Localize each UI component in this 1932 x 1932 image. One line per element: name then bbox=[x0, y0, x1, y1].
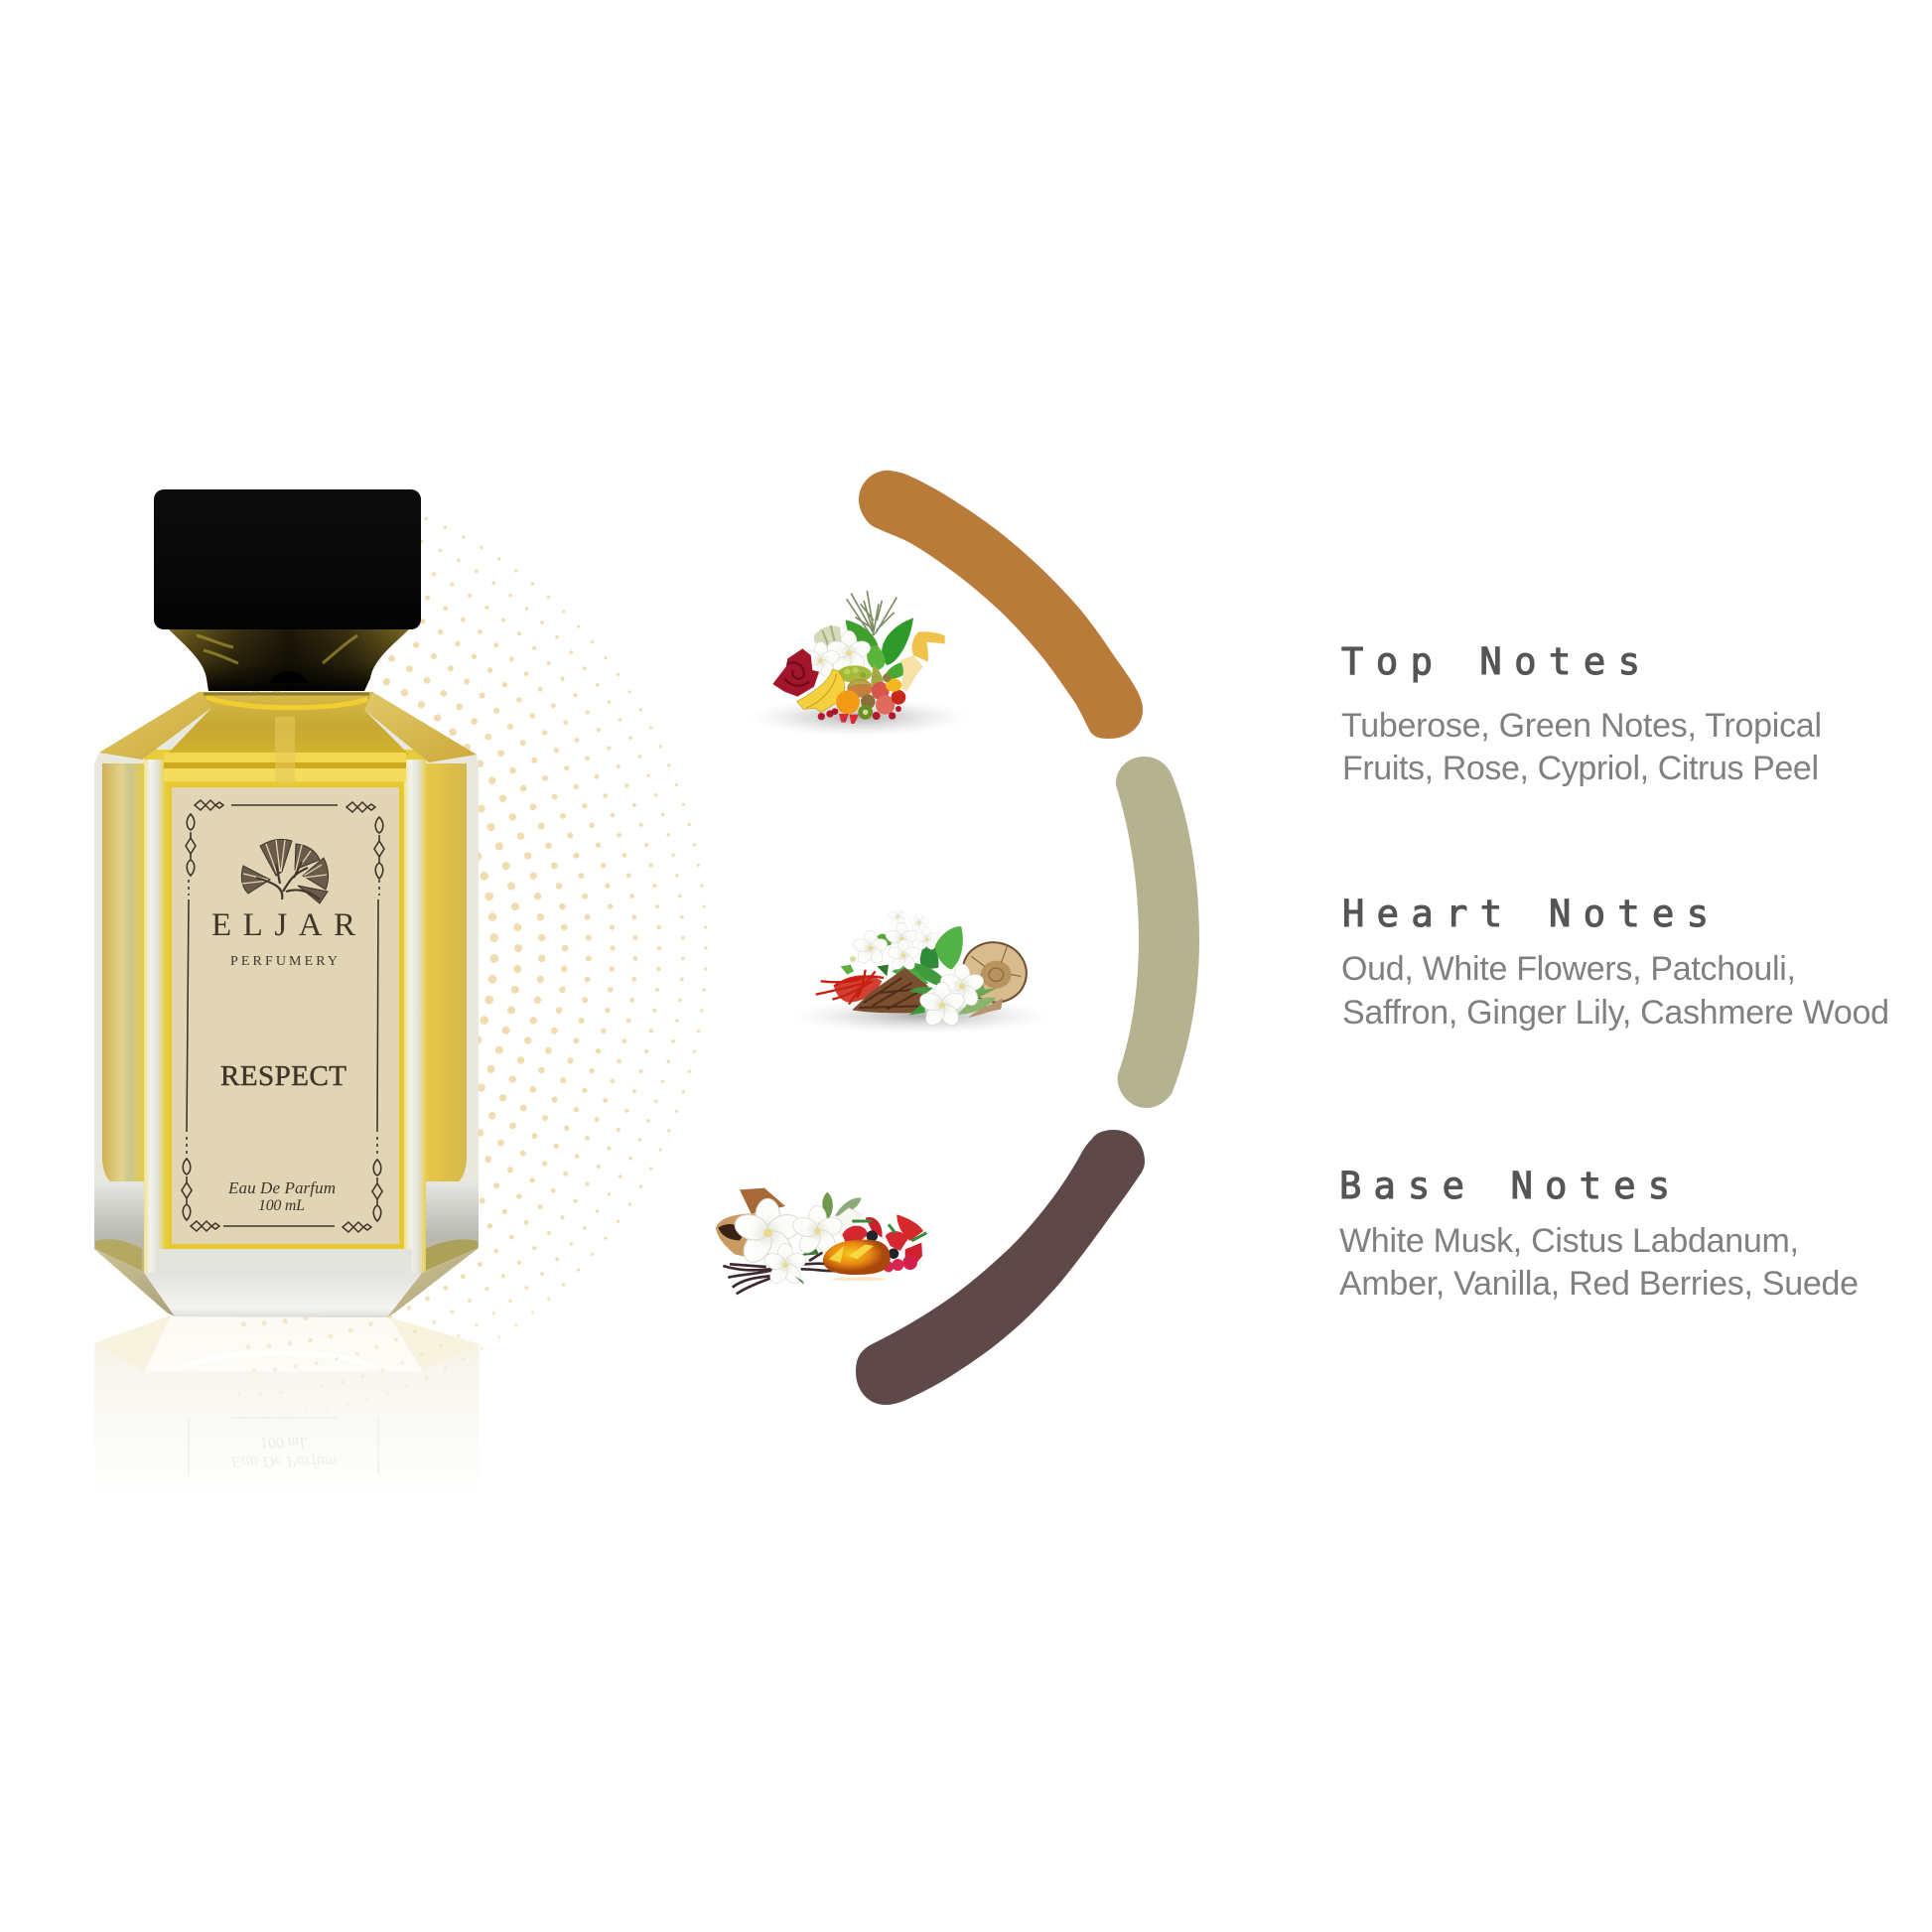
base notes arc bbox=[856, 1130, 1145, 1405]
right gold panel bbox=[426, 763, 467, 1188]
heading: top notes: Top Notes bbox=[1341, 640, 1640, 683]
bright bands above label bbox=[164, 753, 406, 762]
list: heart notes: Oud, White Flowers, Patchouli, bbox=[1341, 950, 1796, 988]
bottle reflection: 100 mL bbox=[260, 1434, 308, 1450]
lower left glass bbox=[94, 1181, 144, 1273]
perfume bottle bbox=[94, 489, 479, 1317]
left gold panel bbox=[102, 763, 144, 1188]
base right chamfer bbox=[387, 1248, 479, 1317]
top notes text bbox=[1341, 640, 1822, 787]
inner glass columns bbox=[144, 759, 165, 1273]
list: top notes: Fruits, Rose, Cypriol, Citrus Peel bbox=[1342, 750, 1819, 787]
heart notes arc bbox=[1116, 757, 1199, 1108]
top notes ingredients: fruits and flowers bbox=[747, 591, 971, 737]
shoulder centre facet bbox=[167, 692, 409, 755]
shoulder left facet bbox=[99, 692, 211, 759]
list: base notes: Amber, Vanilla, Red Berries, Suede bbox=[1339, 1265, 1859, 1303]
bottle reflection bbox=[94, 1315, 480, 1501]
lower right glass bbox=[422, 1181, 479, 1273]
halftone dot semicircle bbox=[236, 479, 706, 1418]
base left chamfer bbox=[94, 1249, 175, 1316]
list: heart notes bbox=[1341, 950, 1889, 1032]
type: Eau De Parfum bbox=[227, 1178, 336, 1197]
base notes ingredients: suede, vanilla, amber, berries bbox=[716, 1188, 926, 1294]
bottle reflection: Eau De Parfum bbox=[230, 1452, 337, 1471]
heart notes text bbox=[1341, 893, 1889, 1032]
tree logo bbox=[241, 839, 329, 903]
product name: RESPECT bbox=[220, 1060, 346, 1092]
liquid behind label bbox=[144, 750, 426, 1256]
cap bbox=[154, 489, 421, 629]
neck bbox=[169, 629, 409, 691]
glass silhouette bbox=[94, 693, 479, 1317]
list: heart notes: Saffron, Ginger Lily, Cashmere Wood bbox=[1342, 994, 1889, 1032]
list: base notes bbox=[1339, 1222, 1859, 1303]
volume: 100 mL bbox=[258, 1197, 305, 1214]
spray tube bbox=[275, 717, 295, 782]
list: top notes: Tuberose, Green Notes, Tropical bbox=[1341, 707, 1822, 745]
brand name: ELJAR bbox=[211, 907, 355, 943]
brand subtitle: PERFUMERY bbox=[230, 954, 338, 969]
glass strip under label bbox=[159, 1249, 412, 1273]
label ornaments bbox=[182, 800, 384, 1232]
label bbox=[169, 783, 403, 1248]
base notes text bbox=[1339, 1165, 1859, 1303]
label border bbox=[187, 805, 379, 1226]
heart notes ingredients: blossoms, oud, saffron, wood bbox=[789, 907, 1054, 1035]
list: base notes: White Musk, Cistus Labdanum, bbox=[1339, 1222, 1799, 1260]
heading: heart notes: Heart Notes bbox=[1342, 893, 1709, 935]
top notes arc bbox=[859, 471, 1143, 739]
base front facet bbox=[144, 1273, 422, 1317]
heading: base notes: Base Notes bbox=[1339, 1165, 1670, 1207]
list: top notes bbox=[1341, 707, 1822, 787]
shoulder right facet bbox=[364, 693, 477, 762]
